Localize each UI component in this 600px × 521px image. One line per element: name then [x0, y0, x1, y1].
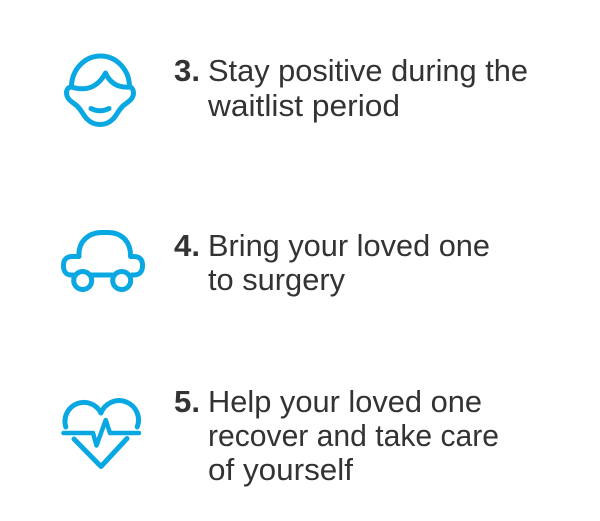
step 5 text	[174, 384, 499, 487]
step 3 text: 3.	[174, 53, 200, 88]
step 5	[64, 384, 499, 487]
step 5 text: 5.	[174, 384, 200, 419]
step 5 text: Help your loved one	[208, 384, 482, 419]
step 5 text: of yourself	[208, 452, 353, 487]
icon: face	[66, 56, 134, 124]
step 3 text	[174, 53, 528, 123]
step 5 text: recover and take care	[208, 418, 499, 453]
step 4	[64, 228, 490, 297]
step 4 text: to surgery	[208, 262, 345, 297]
step 3 text: waitlist period	[207, 88, 400, 123]
icon: heart with pulse	[64, 401, 139, 466]
step 4 text	[174, 228, 490, 297]
step 3	[66, 53, 528, 124]
step 4 text: Bring your loved one	[208, 228, 490, 263]
icon: car	[64, 232, 142, 290]
step 3 text: Stay positive during the	[208, 53, 528, 88]
step 4 text: 4.	[174, 228, 200, 263]
